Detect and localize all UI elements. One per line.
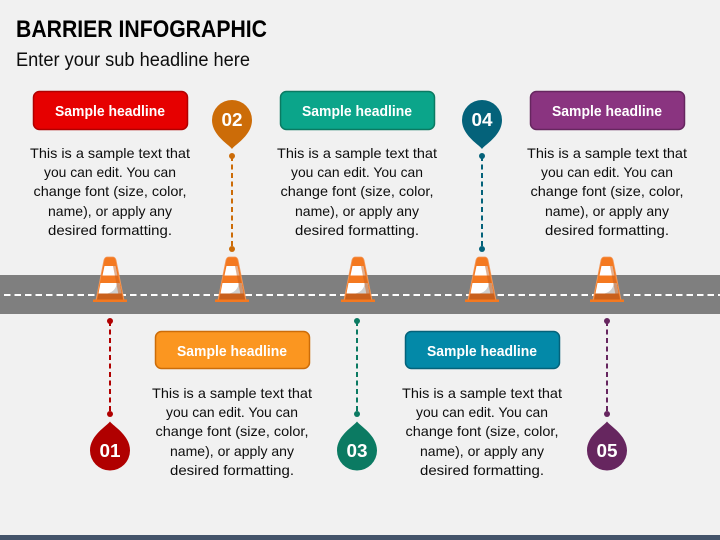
body text 05 <box>527 145 687 238</box>
body text 03: change font (size, color, <box>280 183 434 199</box>
body text 04: name), or apply any <box>420 443 544 459</box>
step 01 pin and connector: 01 <box>100 440 120 461</box>
subtitle: Enter your sub headline here <box>16 50 250 71</box>
step 05 pin and connector: 05 <box>596 440 618 461</box>
headline 02: Sample headline <box>177 344 287 360</box>
body text 01: you can edit. You can <box>44 164 176 180</box>
footer bar <box>0 535 720 540</box>
title: BARRIER INFOGRAPHIC <box>16 16 267 43</box>
step 01 pin and connector <box>90 318 130 470</box>
body text 04: This is a sample text that <box>402 385 562 401</box>
body text 03: desired formatting. <box>295 222 419 238</box>
step 03 pin and connector <box>337 318 377 470</box>
step 03 pin and connector: 03 <box>346 440 368 461</box>
step 02 pin and connector: 02 <box>222 109 242 130</box>
cone 1 <box>93 257 127 302</box>
body text 04: change font (size, color, <box>406 423 558 439</box>
body text 01: change font (size, color, <box>34 183 186 199</box>
body text 04: desired formatting. <box>420 462 544 478</box>
headline 05 <box>530 92 684 130</box>
cone 2 <box>215 257 249 302</box>
body text 02: desired formatting. <box>170 462 294 478</box>
body text 02: you can edit. You can <box>166 404 298 420</box>
headline 03 <box>280 92 434 130</box>
cone 3 <box>341 257 375 302</box>
step 04 pin and connector <box>462 100 502 252</box>
body text 05: name), or apply any <box>545 203 669 219</box>
body text 02 <box>152 385 312 478</box>
headline 04: Sample headline <box>427 344 537 360</box>
panel: step 05 text <box>527 92 687 238</box>
body text 01: name), or apply any <box>48 203 172 219</box>
panel: step 01 text <box>30 92 190 238</box>
body text 02: name), or apply any <box>170 443 294 459</box>
body text 02: This is a sample text that <box>152 385 312 401</box>
body text 02: change font (size, color, <box>156 423 308 439</box>
headline 05: Sample headline <box>552 104 662 120</box>
body text 03 <box>277 145 437 238</box>
body text 04: you can edit. You can <box>416 404 548 420</box>
body text 01: This is a sample text that <box>30 145 190 161</box>
body text 05: you can edit. You can <box>541 164 673 180</box>
body text 05: change font (size, color, <box>530 183 684 199</box>
panel: step 03 text <box>277 92 437 238</box>
body text 03: This is a sample text that <box>277 145 437 161</box>
headline 04 <box>406 332 560 368</box>
step 04 pin and connector: 04 <box>472 109 493 130</box>
body text 05: This is a sample text that <box>527 145 687 161</box>
headline 02 <box>156 332 310 368</box>
headline 01 <box>34 92 188 130</box>
step 02 pin and connector <box>212 100 252 252</box>
body text 05: desired formatting. <box>545 222 669 238</box>
cone 4 <box>465 257 499 302</box>
body text 03: name), or apply any <box>295 203 419 219</box>
panel: step 02 text <box>152 332 312 478</box>
body text 01 <box>30 145 190 238</box>
road <box>0 275 720 314</box>
step 05 pin and connector <box>587 318 627 470</box>
body text 01: desired formatting. <box>48 222 172 238</box>
panel: step 04 text <box>402 332 562 478</box>
headline 01: Sample headline <box>55 104 165 120</box>
headline 03: Sample headline <box>302 104 412 120</box>
cone 5 <box>590 257 624 302</box>
body text 03: you can edit. You can <box>291 164 423 180</box>
body text 04 <box>402 385 562 478</box>
